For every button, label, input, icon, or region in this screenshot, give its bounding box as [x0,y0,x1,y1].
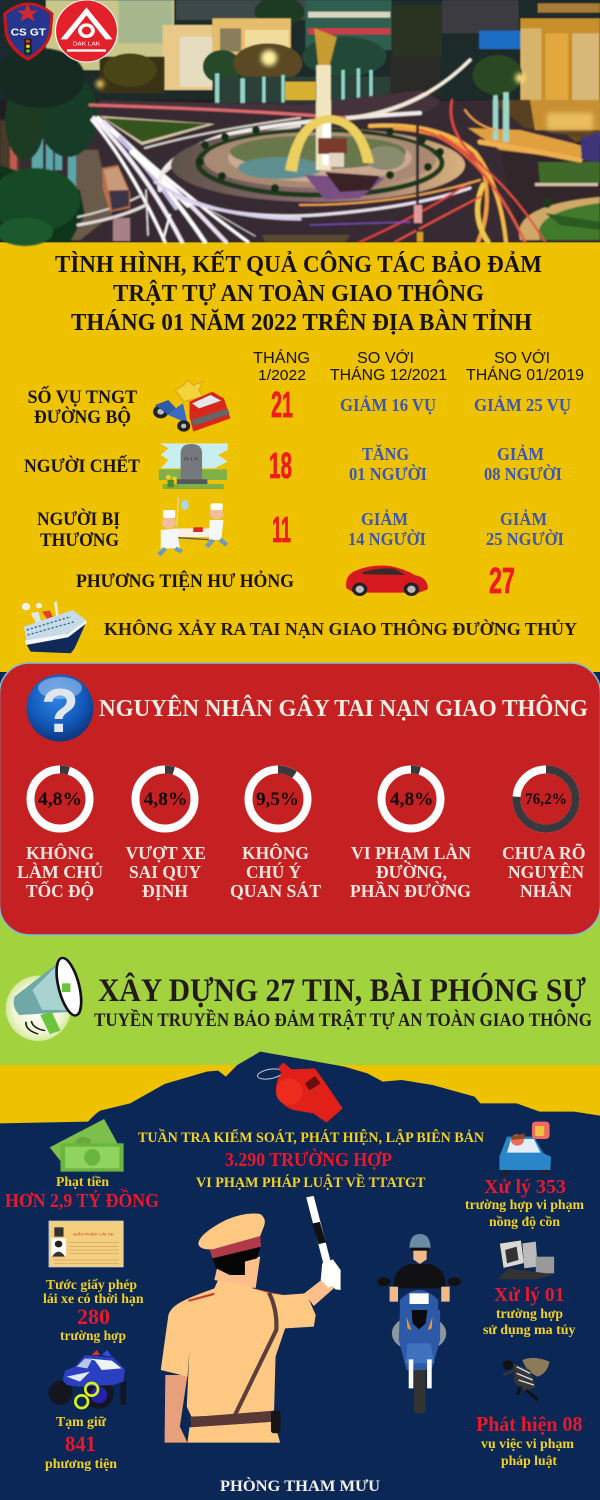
text: Xử lý 01 [494,1284,564,1306]
icon: banknotes [50,1119,124,1172]
logo: CSGT shield: CS GT [11,27,46,38]
label: SỐ VỤ TNGT [28,386,138,408]
icon: red car [346,566,428,596]
donut: không chú ý quan sát: CHÚ Ý [246,861,301,882]
illustration: motorcycle [377,1234,461,1413]
text: Tước giấy phép [46,1278,137,1293]
title: THÁNG 01 NĂM 2022 TRÊN ĐỊA BÀN TỈNH [71,308,532,336]
text: Xử lý 353 [484,1176,566,1198]
left column: vehicles impounded: 841 [65,1431,96,1456]
icon: gravestone [159,443,228,489]
right column: legal violations: pháp luật [501,1454,557,1469]
label [37,508,120,551]
comparison 01/2019: 25 NGƯỜI [486,528,564,549]
value: 27 [489,560,515,601]
lower photo in pixel coordinates [0,28,600,246]
donut: không làm chủ tốc độ: LÀM CHỦ [17,861,103,882]
icon: megaphone [6,956,86,1041]
donut: không làm chủ tốc độ: 4,8% [38,789,82,810]
label: NGƯỜI BỊ [37,508,120,530]
label: ĐƯỜNG BỘ [34,406,131,428]
icon: medics with stretcher [159,497,227,555]
donut: vi phạm làn đường: 4,8% [390,789,434,810]
table column headers: 1/2022 [258,367,306,384]
comparison 12/2021 [348,509,426,549]
title: TRẬT TỰ AN TOÀN GIAO THÔNG [113,278,484,307]
donut: vượt xe sai quy định: SAI QUY [129,862,201,882]
donut: vượt xe sai quy định [126,770,206,901]
right column: legal violations [476,1358,582,1469]
row: người chết [24,443,562,489]
label: NGƯỜI CHẾT [24,455,141,477]
donut: vượt xe sai quy định: 4,8% [144,789,188,810]
comparison 12/2021: GIẢM [361,509,408,529]
value: 21 [271,384,293,425]
donut: vi phạm làn đường: ĐƯỜNG, [376,861,447,882]
donut: vượt xe sai quy định: VƯỢT XE [126,843,206,863]
shirt [161,1280,316,1417]
water traffic statement: KHÔNG XẢY RA TAI NẠN GIAO THÔNG ĐƯỜNG THỦY [104,619,577,639]
head and neck [214,1257,260,1288]
donut: chưa rõ nguyên nhân: CHƯA RÕ [502,842,586,863]
comparison 01/2019: GIẢM [497,444,544,464]
illustration: traffic officer [161,1197,341,1443]
green section background [0,800,600,1070]
donut: không làm chủ tốc độ: KHÔNG [26,842,94,863]
icon: car crash [153,380,230,432]
donut: vượt xe sai quy định: ĐỊNH [142,881,188,901]
label: PHƯƠNG TIỆN HƯ HỎNG [76,570,294,592]
comparison 01/2019: GIẢM [500,509,547,529]
donut: chưa rõ nguyên nhân: 76,2% [525,791,567,808]
left column: fines [5,1119,159,1212]
left column: vehicles impounded [45,1350,126,1472]
icon: question sphere: ? [41,677,79,746]
donut: không chú ý quan sát [230,770,321,901]
central patrol statement: TUẦN TRA KIỂM SOÁT, PHÁT HIỆN, LẬP BIÊN BẢN [138,1128,485,1146]
table column headers: THÁNG 12/2021 [330,367,447,384]
panel: enforcement background [0,1052,600,1500]
table column headers: THÁNG 01/2019 [466,367,584,384]
band: communication [6,956,592,1041]
left column: licence suspension: trường hợp [60,1329,126,1344]
label [28,386,138,428]
donut: chưa rõ nguyên nhân: NHÂN [520,880,572,901]
icon: whistle [257,1063,343,1123]
icon: driving licence: GIẤY PHÉP LÁI XE [73,1232,114,1236]
text: Phạt tiền [56,1175,109,1190]
left column: licence suspension [43,1221,144,1344]
right column: drug violations: trường hợp [496,1307,563,1322]
text: Tạm giữ [56,1415,107,1430]
central patrol statement [138,1128,485,1191]
panel: causes [0,663,600,935]
left column: vehicles impounded: phương tiện [45,1457,117,1472]
icon: thief with sack [503,1358,550,1400]
table column headers: THÁNG [253,348,310,367]
comparison 01/2019 [486,509,564,549]
left column: licence suspension: 280 [77,1304,110,1329]
right column: legal violations: vụ việc vi phạm [481,1437,574,1452]
title [55,249,542,336]
yellow statistics background [0,242,600,672]
icon: drunk driver [499,1122,551,1175]
text: Phát hiện 08 [476,1412,582,1436]
table column headers [253,348,584,384]
left column: fines: HƠN 2,9 TỶ ĐỒNG [5,1190,159,1212]
comparison 12/2021: GIẢM 16 VỤ [340,395,436,415]
strap and belt [234,1293,276,1417]
row: phương tiện hư hỏng [76,560,515,601]
table column headers: SO VỚI [494,348,550,367]
table column headers: SO VỚI [357,348,414,367]
row: số vụ TNGT [28,380,571,432]
central patrol statement: VI PHẠM PHÁP LUẬT VỀ TTATGT [196,1174,426,1191]
icon: police truck and handcuffs [49,1350,126,1409]
donut: không làm chủ tốc độ [17,770,103,901]
right column: alcohol violations: trường hợp vi phạm [465,1198,584,1213]
right column: drug violations: sử dụng ma túy [483,1323,576,1338]
donut: không làm chủ tốc độ: TỐC ĐỘ [26,880,94,901]
icon: question sphere [26,674,94,746]
icon: gravestone: R.I.P. [184,457,199,461]
right column: alcohol violations [465,1122,584,1230]
title: TÌNH HÌNH, KẾT QUẢ CÔNG TÁC BẢO ĐẢM [55,249,542,278]
comparison 01/2019 [484,444,562,484]
donut: chưa rõ nguyên nhân [502,770,586,901]
donut: không chú ý quan sát: 9,5% [256,789,299,810]
glove [321,1259,341,1290]
logo: Dak Lak [55,0,117,62]
comparison 01/2019: GIẢM 25 VỤ [474,395,571,415]
donut: vi phạm làn đường: PHẦN ĐƯỜNG [350,880,471,901]
donut: không chú ý quan sát: KHÔNG [242,842,309,863]
footer credit: PHÒNG THAM MƯU [220,1476,380,1495]
arms [304,1278,335,1306]
comparison 12/2021: 01 NGƯỜI [349,463,427,484]
logo: Dak Lak: DAK LAK [73,41,100,48]
row: người bị thương [37,497,564,555]
right column: drug violations [483,1240,576,1338]
central patrol statement: 3.290 TRƯỜNG HỢP [225,1149,392,1171]
right column: alcohol violations: nồng độ cồn [489,1215,560,1230]
value: 18 [269,445,292,486]
baton [310,1197,327,1263]
icon: ship [22,602,86,653]
icon: drugs collage [498,1240,554,1279]
donut: chưa rõ nguyên nhân: NGUYÊN [508,861,584,882]
cap [210,1236,261,1258]
photo: roundabout at night [0,0,600,246]
comparison 12/2021: TĂNG [362,443,409,464]
donut: vi phạm làn đường [350,770,471,901]
comparison 12/2021: 14 NGƯỜI [348,528,426,549]
left column: licence suspension: lái xe có thời hạn [43,1292,144,1307]
yellow band behind mountain [0,1065,600,1145]
logo: CSGT shield [3,2,54,61]
row: người bị thương: 11 [272,509,291,550]
comparison 01/2019: 08 NGƯỜI [484,463,562,484]
comparison 12/2021 [349,443,427,484]
label: THƯƠNG [40,531,119,551]
donut: không chú ý quan sát: QUAN SÁT [230,880,321,901]
donut: vi phạm làn đường: VI PHẠM LÀN [351,842,471,863]
